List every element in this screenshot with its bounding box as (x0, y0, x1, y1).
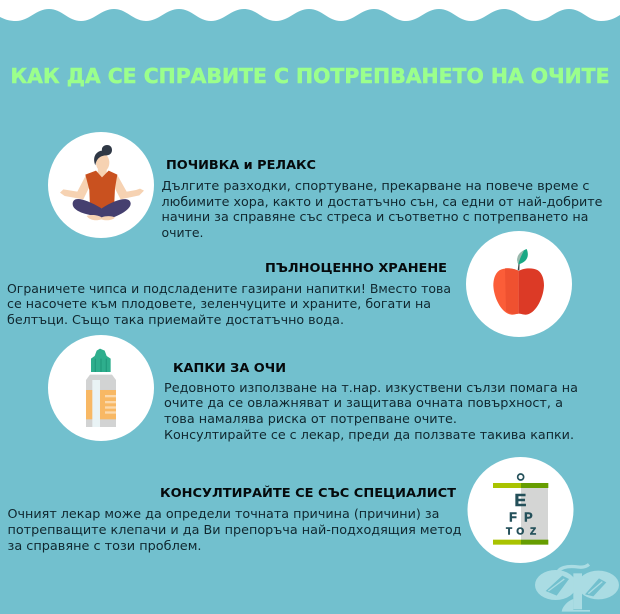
text block: rest and relax (162, 178, 603, 240)
text block: rest and relax: Дългите разходки, спортуване, прекарване на повече време с (162, 178, 590, 193)
heading: eye drops: КАПКИ ЗА ОЧИ (173, 360, 286, 375)
text block: full nutrition: се насочете към плодовете, зеленчуците и храните, богати на (7, 296, 431, 311)
text block: eye drops: Консултирайте се с лекар, преди да ползвате такива капки. (164, 427, 574, 442)
text block: consult a specialist: за справяне с този проблем. (8, 538, 202, 553)
icon: eye chart: E (514, 490, 526, 510)
text block: consult a specialist: Очният лекар може да определи точната причина (причини) за (8, 506, 440, 521)
heading: consult a specialist: КОНСУЛТИРАЙТЕ СЕ СЪС СПЕЦИАЛИСТ (160, 485, 456, 500)
icon: meditating woman (48, 132, 154, 238)
text block: full nutrition (7, 281, 451, 327)
icon: eye chart: P (524, 510, 533, 524)
text block: eye drops (164, 380, 578, 442)
icon: apple (466, 231, 572, 337)
logo watermark (535, 564, 619, 612)
icon: eye chart: Z (530, 527, 536, 538)
text block: eye drops: това намалява риска от потрепване очите. (164, 411, 457, 426)
icon: eye chart: O (516, 527, 524, 538)
text block: consult a specialist: потрепващите клепачи и да Ви препоръча най-подходящия метод (8, 522, 461, 537)
title: КАК ДА СЕ СПРАВИТЕ С ПОТРЕПВАНЕТО НА ОЧИТЕ (10, 64, 610, 88)
text block: full nutrition: Ограничете чипса и подсладените газирани напитки! Вместо това (7, 281, 451, 296)
icon: eye chart: F (509, 510, 517, 524)
icon: eye chart: T (506, 527, 512, 538)
text block: rest and relax: любимите хора, както и достатъчно сън, са едни от най-добрите (162, 194, 603, 209)
heading: full nutrition: ПЪЛНОЦЕННО ХРАНЕНЕ (265, 260, 447, 275)
heading: rest and relax: ПОЧИВКА и РЕЛАКС (166, 157, 316, 172)
text block: eye drops: очите да се овлажняват и защитава очната повърхност, а (164, 395, 563, 410)
text block: full nutrition: белтъци. Също така приемайте достатъчно вода. (7, 312, 344, 327)
text block: rest and relax: очите. (162, 225, 204, 240)
text block: rest and relax: начини за справяне със стреса и съответно с потрепването на (162, 209, 588, 224)
text block: consult a specialist (8, 506, 461, 553)
icon: eye drops bottle (48, 335, 154, 441)
icon: eye chart (468, 457, 574, 563)
text block: eye drops: Редовното използване на т.нар. изкуствени сълзи помага на (164, 380, 578, 395)
